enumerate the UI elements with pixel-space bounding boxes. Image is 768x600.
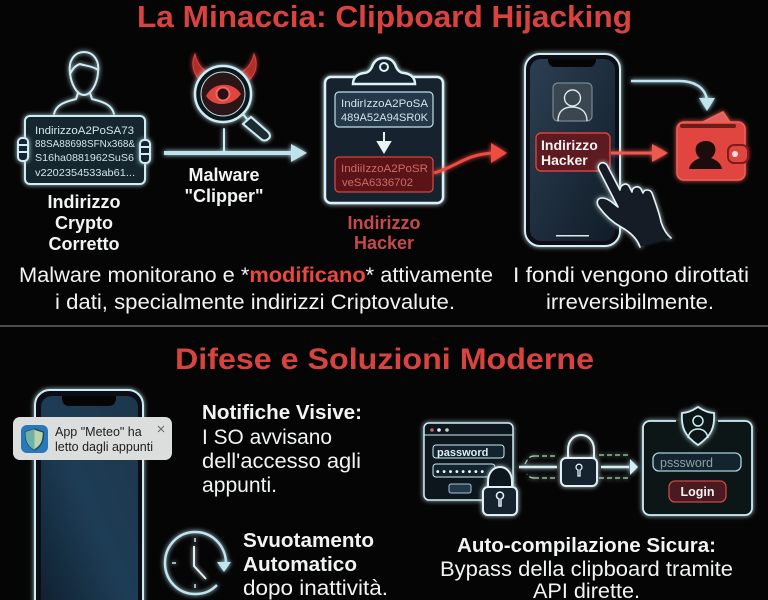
label: malware clipper: Malware xyxy=(188,165,260,185)
arrow: funds redirected xyxy=(631,81,715,111)
original address box: IndirIzzoA2PoSA xyxy=(341,98,429,110)
address card xyxy=(25,116,145,184)
label: correct address: Corretto xyxy=(48,234,120,254)
icon: padlock on browser xyxy=(483,467,517,515)
label: malware clipper: "Clipper" xyxy=(184,186,264,206)
panel: clipper malware xyxy=(164,54,307,206)
text: visual notifications: dell'accesso agli xyxy=(202,449,361,473)
notification toast: App "Meteo" ha xyxy=(55,425,142,439)
title: threat: La Minaccia: Clipboard Hijacking xyxy=(137,0,632,34)
login card xyxy=(643,421,752,515)
label: hacker address: Hacker xyxy=(354,233,414,253)
address text xyxy=(35,125,135,179)
original address box xyxy=(335,92,433,127)
panel: secure autofill xyxy=(424,407,752,600)
icon: magnifier with eye xyxy=(195,66,270,140)
text: automatic clearing: Automatico xyxy=(243,554,357,576)
browser window: •••••••• xyxy=(436,467,484,478)
icon: hacker wallet xyxy=(677,112,748,180)
icon: hands holding card xyxy=(18,138,150,163)
text: secure autofill: Auto-compilazione Sicura: xyxy=(457,535,716,557)
icon: central padlock xyxy=(561,435,597,486)
address text: 88SA88698SFNx368& xyxy=(35,138,135,150)
hacker address box: IndiiIzzoA2PoSR xyxy=(341,163,428,175)
arrow: direct API xyxy=(519,455,638,478)
description: funds: I fondi vengono dirottati xyxy=(513,263,749,287)
hacker address box xyxy=(536,133,610,171)
address text: IndirizzoA2PoSA73 xyxy=(35,125,134,137)
original address box: 489A52A94SR0K xyxy=(341,112,429,124)
hacker address box xyxy=(335,157,433,192)
text: visual notifications: I SO avvisano xyxy=(202,425,332,449)
home indicator xyxy=(556,235,589,236)
text: visual notifications xyxy=(202,402,362,497)
description: funds xyxy=(513,263,749,314)
text: secure autofill: Bypass della clipboard tramite xyxy=(440,557,733,581)
section divider xyxy=(0,325,768,327)
phone screen xyxy=(530,59,615,241)
browser window: password xyxy=(437,447,488,459)
text: automatic clearing: dopo inattività. xyxy=(243,576,388,600)
title: defenses: Difese e Soluzioni Moderne xyxy=(175,343,594,376)
icon: tapping hand xyxy=(597,163,671,247)
address text: v2202354533ab61... xyxy=(35,167,135,179)
hacker address box: Hacker xyxy=(541,152,588,168)
hacker address box: Indirizzo xyxy=(541,137,598,153)
label: correct address: Crypto xyxy=(55,213,113,233)
arrow: malware flow xyxy=(164,129,307,162)
text: visual notifications: appunti. xyxy=(202,473,277,497)
description: funds: irreversibilmente. xyxy=(546,290,714,314)
arrow: to phone xyxy=(434,143,507,173)
description: malware xyxy=(19,263,493,314)
text: automatic clearing xyxy=(243,530,388,600)
phone notch xyxy=(548,59,596,67)
icon: user shield xyxy=(682,407,714,445)
panel: clipboard xyxy=(325,58,507,253)
panel: correct crypto address xyxy=(18,52,150,254)
browser window xyxy=(424,423,513,500)
login card: psssword xyxy=(660,456,713,470)
text: secure autofill xyxy=(440,535,733,600)
notification toast: letto dagli appunti xyxy=(55,440,153,454)
label: correct address: Indirizzo xyxy=(48,192,120,212)
icon: person xyxy=(54,52,114,114)
arrow: phone to wallet xyxy=(611,144,668,162)
hacker address box: veSA6336702 xyxy=(342,177,413,189)
description: malware: i dati, specialmente indirizzi Criptovalute. xyxy=(55,290,455,314)
label: hacker address: Indirizzo xyxy=(348,213,420,233)
panel: automatic clearing xyxy=(165,530,388,600)
icon: contact avatar xyxy=(553,83,592,121)
icon: horns xyxy=(193,54,256,84)
description: malware: Malware monitorano e *modificano* attivamente xyxy=(19,263,493,287)
arrow: replacement xyxy=(378,132,390,152)
panel: phone with hacker address xyxy=(525,54,748,247)
address text: S16ha0881962SuS6 xyxy=(35,152,134,164)
icon: clock xyxy=(165,532,231,594)
phone body xyxy=(525,54,620,246)
clipboard board xyxy=(325,58,443,203)
panel: visual notifications xyxy=(13,390,362,600)
login card: Login xyxy=(680,485,715,499)
icon: shield xyxy=(21,425,48,453)
text: automatic clearing: Svuotamento xyxy=(243,530,374,552)
text: visual notifications: Notifiche Visive: xyxy=(202,402,362,424)
phone xyxy=(35,390,143,600)
notification toast xyxy=(13,417,172,460)
